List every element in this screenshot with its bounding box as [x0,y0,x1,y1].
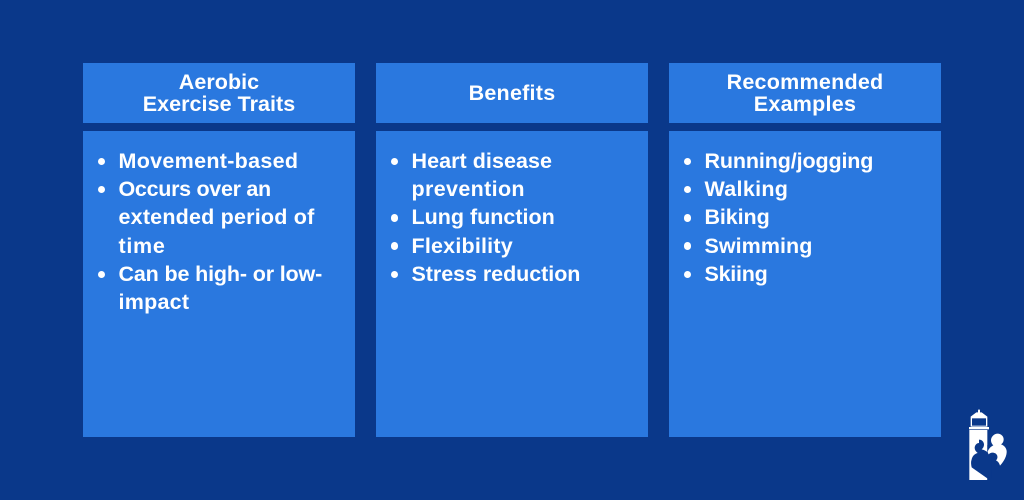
panel: examples list: Skiing [704,262,768,286]
panel: traits list: time [118,234,166,258]
header: aerobic exercise traits: Exercise Traits [143,92,295,116]
panel: benefits list: prevention [412,177,525,201]
panel: benefits list: Stress reduction [412,262,580,286]
panel: traits list [83,131,355,437]
panel: examples list [669,131,941,437]
panel: traits list: impact [118,290,189,314]
panel: traits list: Movement-based [118,149,298,173]
header: aerobic exercise traits [83,63,355,123]
panel: traits list: Can be high- or low- [118,262,322,286]
icon: lighthouse logo [969,409,1007,480]
panel: examples list: Biking [704,205,770,229]
header: recommended examples: Recommended [727,70,883,94]
panel: examples list: Swimming [704,234,812,258]
panel: traits list: Occurs over an [118,177,271,201]
panel: traits list: extended period of [118,205,314,229]
header: benefits: Benefits [469,81,555,105]
header: recommended examples: Examples [754,92,856,116]
panel: benefits list: Flexibility [412,234,513,258]
panel: examples list: Walking [704,177,788,201]
panel: examples list: Running/jogging [704,149,873,173]
header: benefits [376,63,648,123]
panel: benefits list: Lung function [412,205,555,229]
header: aerobic exercise traits: Aerobic [179,70,259,94]
panel: benefits list [376,131,648,437]
panel: benefits list: Heart disease [412,149,552,173]
header: recommended examples [669,63,941,123]
